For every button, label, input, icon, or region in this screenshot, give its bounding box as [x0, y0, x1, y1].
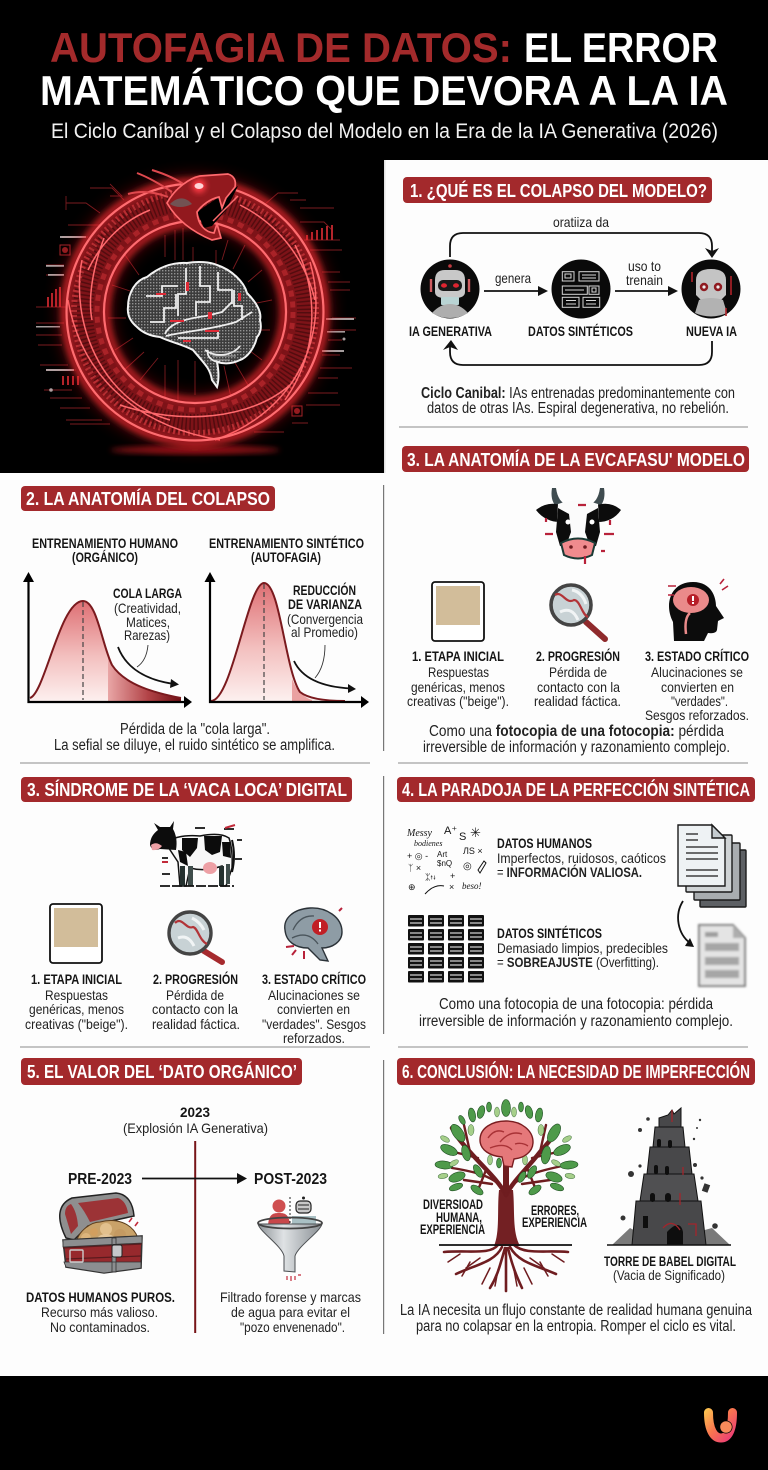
stage 3 text: reforzados.: [283, 1030, 345, 1046]
tree label left: EXPERIENCIA: [420, 1222, 485, 1237]
icon: messy scribbles: $nQ: [437, 859, 452, 868]
stage 1 text: creativas ("beige").: [25, 1016, 128, 1032]
annotation: reduccion de varianza: REDUCCIÓN: [293, 583, 356, 598]
text: perdida cola larga: [54, 721, 335, 754]
timeline year label: 2023: [180, 1105, 210, 1120]
tree label right: ERRORES,: [531, 1203, 579, 1218]
icon: messy scribbles: ✳: [470, 825, 481, 840]
text: datos humanos puros: Recurso más valioso.: [41, 1304, 158, 1320]
stage 1 text: [25, 972, 128, 1032]
text: datos humanos puros: [26, 1290, 175, 1335]
stage 1 text: Respuestas: [428, 664, 489, 680]
top loop label: oratiiza da: [553, 214, 609, 230]
text: datos sinteticos: = SOBREAJUSTE (Overfitting).: [497, 954, 659, 970]
icon: messy scribbles: ◎: [463, 861, 472, 872]
text: datos humanos: = INFORMACIÓN VALIOSA.: [497, 863, 642, 880]
chart: organic bell curve: [23, 572, 192, 708]
stage 2 text: Pérdida de: [549, 664, 607, 680]
timeline arrow: [68, 1171, 327, 1188]
icon: blurred document: [699, 925, 745, 986]
snake ring: [64, 181, 326, 443]
icon: polaroid beige: [432, 582, 484, 641]
panel: anatomia del modelo (right): [402, 446, 749, 756]
tree label right: [522, 1203, 587, 1230]
timeline arrow: POST-2023: [254, 1171, 327, 1188]
text: filtrado forense: de agua para evitar el: [231, 1304, 350, 1320]
icon: glitched cow: [150, 821, 242, 886]
arrow: genera: [484, 270, 548, 296]
circuit lines: [36, 184, 356, 432]
tree label left: HUMANA,: [436, 1210, 482, 1225]
chart title left: (ORGÁNICO): [72, 550, 138, 565]
text: perdida cola larga: Pérdida de la "cola larga".: [120, 721, 270, 738]
timeline divider: [194, 1141, 196, 1333]
stage 1 text: [407, 649, 509, 709]
text: datos sinteticos: [497, 926, 668, 970]
panel: 3 sindrome vaca loca: [21, 777, 366, 1046]
text: datos humanos: [497, 836, 666, 880]
icon: sharp documents stack: [678, 825, 746, 907]
tower caption: [604, 1254, 736, 1283]
chart title left: [32, 536, 178, 565]
snake head: [128, 170, 238, 240]
icon: data grid: [408, 915, 484, 982]
stage 2 text: 2. PROGRESIÓN: [536, 649, 620, 664]
icon: filter funnel: [258, 1196, 322, 1281]
icon: messy scribbles: beso!: [462, 881, 482, 891]
stage 1 text: 1. ETAPA INICIAL: [31, 972, 122, 987]
stage 3 text: convierten en: [277, 1001, 350, 1017]
icon: messy scribbles: [406, 825, 486, 894]
text: datos sinteticos: Demasiado limpios, predecibles: [497, 940, 668, 956]
text: datos humanos: DATOS HUMANOS: [497, 836, 592, 851]
stage 3 text: Alucinaciones se: [651, 664, 743, 680]
heading 5: 5. EL VALOR DEL ‘DATO ORGÁNICO’: [27, 1061, 297, 1082]
text: datos sinteticos: DATOS SINTÉTICOS: [497, 926, 602, 941]
stage 2 text: 2. PROGRESIÓN: [153, 972, 238, 987]
arrow: genera: genera: [495, 270, 531, 286]
stage 3 text: 3. ESTADO CRÍTICO: [262, 972, 366, 987]
subtitle: El Ciclo Caníbal y el Colapso del Modelo en la Era de la IA Generativa (2026): [51, 119, 718, 143]
annotation: cola larga: (Creatividad,: [114, 600, 181, 616]
cycle diagram: [409, 214, 740, 365]
icon: glitched cow head: [536, 488, 621, 564]
stage 1 text: creativas ("beige").: [407, 693, 509, 709]
icon: messy scribbles: ᛉ ×: [408, 863, 421, 873]
stage 3 text: [262, 972, 366, 1046]
chart title right: (AUTOFAGIA): [251, 550, 321, 565]
text: filtrado forense: Filtrado forense y marcas: [220, 1289, 361, 1305]
stage 2 text: realidad fáctica.: [152, 1016, 240, 1032]
stage 1 text: genéricas, menos: [411, 679, 505, 695]
heading 1: [403, 177, 712, 203]
icon: treasure chest: [60, 1193, 142, 1273]
stage 1 text: 1. ETAPA INICIAL: [412, 649, 504, 664]
text: perdida cola larga: La sefial se diluye, el ruido sintético se amplifica.: [54, 737, 335, 754]
conclusion text: [400, 1302, 752, 1335]
icon: messy scribbles: ЛS ×: [463, 846, 483, 856]
stage 3 text: [645, 649, 749, 723]
bottom loop arrow: [443, 340, 712, 365]
annotation: cola larga: COLA LARGA: [113, 586, 182, 601]
chart title right: [209, 536, 364, 565]
stage 3 text: "verdades".: [671, 693, 728, 709]
icon: messy scribbles: ⊕: [408, 882, 416, 892]
title: AUTOFAGIA DE DATOS:: [50, 24, 512, 71]
panel: 5 valor dato organico: [21, 1058, 361, 1335]
stage 2 text: [152, 972, 240, 1032]
icon: messy scribbles: ᛯ⇅: [425, 872, 437, 882]
annotation: reduccion de varianza: al Promedio): [291, 624, 358, 640]
title: MATEMÁTICO QUE DEVORA A LA IA: [40, 67, 728, 114]
icon: logo: [708, 1412, 732, 1438]
text: filtrado forense: [220, 1289, 361, 1335]
fotocopia text: Como una fotocopia de una fotocopia: pérdida: [429, 723, 724, 740]
icon: messy scribbles: A⁺: [444, 825, 457, 837]
panel: 1 que es el colapso: [403, 177, 740, 417]
panel: ouroboros image: [0, 160, 384, 473]
icon: polaroid beige: [50, 904, 102, 963]
fotocopia text: [419, 996, 733, 1030]
annotation: reduccion de varianza: [287, 583, 363, 693]
chart: synthetic bell curve: [204, 572, 369, 708]
icon: robot generative: [420, 260, 480, 318]
panel: 2 anatomia del colapso: [21, 486, 369, 754]
fotocopia text: Como una fotocopia de una fotocopia: pérdida: [439, 996, 713, 1013]
chart title left: ENTRENAMIENTO HUMANO: [32, 536, 178, 551]
panel: 6 conclusion: [397, 1058, 755, 1335]
stage 2 text: realidad fáctica.: [534, 693, 621, 709]
stage 2 text: contacto con la: [537, 679, 620, 695]
title: EL ERROR: [524, 24, 718, 71]
tree label left: [420, 1197, 485, 1237]
illustration: brain tree: [435, 1100, 578, 1291]
heading 5: [21, 1058, 302, 1085]
arrow: degrade: [678, 901, 694, 947]
heading vaca loca: 3. SÍNDROME DE LA ‘VACA LOCA’ DIGITAL: [27, 779, 347, 800]
top loop arrow: [450, 233, 719, 258]
icon: magnifier: [551, 585, 605, 639]
timeline year label: (Explosión IA Generativa): [123, 1120, 268, 1136]
icon: synthetic data: [552, 260, 610, 318]
annotation: cola larga: [113, 586, 182, 688]
annotation: cola larga: Rarezas): [124, 627, 170, 643]
stage 2 text: [534, 649, 621, 709]
stage 3 text: convierten en: [661, 679, 734, 695]
annotation: reduccion de varianza: DE VARIANZA: [288, 597, 362, 612]
stage 2 text: contacto con la: [152, 1001, 238, 1017]
chart title right: ENTRENAMIENTO SINTÉTICO: [209, 536, 364, 551]
stage 1 text: Respuestas: [45, 987, 108, 1003]
icon: new robot: [682, 260, 740, 318]
annotation: reduccion de varianza: (Convergencia: [287, 611, 363, 627]
icon: messy scribbles: bodienes: [414, 839, 442, 848]
text: datos humanos puros: DATOS HUMANOS PUROS.: [26, 1290, 175, 1305]
heading 2: 2. LA ANATOMÍA DEL COLAPSO: [26, 488, 270, 509]
text: datos humanos: Imperfectos, ruidosos, caóticos: [497, 850, 666, 866]
icon: magnifier: [169, 912, 222, 962]
stage 3 text: Alucinaciones se: [268, 987, 360, 1003]
heading 1: 1. ¿QUÉ ES EL COLAPSO DEL MODELO?: [410, 180, 707, 201]
tree label left: DIVERSIOAD: [423, 1197, 483, 1212]
icon: messy scribbles: Art: [437, 850, 448, 859]
illustration: tower of babel: [607, 1108, 731, 1245]
icon: brain alert: [285, 908, 342, 961]
stage 1 text: genéricas, menos: [29, 1001, 124, 1017]
brain circuit: [128, 262, 261, 387]
text: filtrado forense: "pozo envenenado".: [240, 1319, 345, 1335]
stage 2 text: Pérdida de: [166, 987, 224, 1003]
label: IA generativa: IA GENERATIVA: [409, 324, 492, 339]
text: ciclo canibal: [421, 385, 735, 417]
fotocopia text: [423, 723, 730, 756]
tower caption: (Vacia de Significado): [613, 1267, 725, 1283]
icon: head with alert: [668, 579, 728, 641]
icon: messy scribbles: Messy: [406, 828, 433, 839]
icon: messy scribbles: S: [459, 831, 466, 843]
stage 3 text: "verdades". Sesgos: [262, 1016, 366, 1032]
annotation: cola larga: Matices,: [126, 614, 170, 630]
header band: [0, 0, 768, 160]
footer band: [0, 1376, 768, 1470]
arrow: uso to trenain: [615, 258, 678, 296]
icon: messy scribbles: + ◎ -: [407, 851, 428, 861]
icon: messy scribbles: +: [450, 871, 455, 881]
panel: 4 paradoja perfeccion: [397, 777, 755, 1030]
text: datos humanos puros: No contaminados.: [50, 1319, 150, 1335]
stage 3 text: Sesgos reforzados.: [645, 707, 749, 723]
timeline arrow: PRE-2023: [68, 1171, 132, 1188]
icon: messy scribbles: ×: [449, 882, 454, 892]
label: datos sinteticos: DATOS SINTÉTICOS: [528, 324, 633, 339]
label: nueva IA: NUEVA IA: [686, 324, 737, 339]
arrow: uso to trenain: trenain: [626, 272, 663, 288]
arrow: uso to trenain: uso to: [628, 258, 661, 274]
title: [40, 24, 728, 114]
timeline year label: [123, 1105, 268, 1136]
tree label right: EXPERIENCIA: [522, 1215, 587, 1230]
